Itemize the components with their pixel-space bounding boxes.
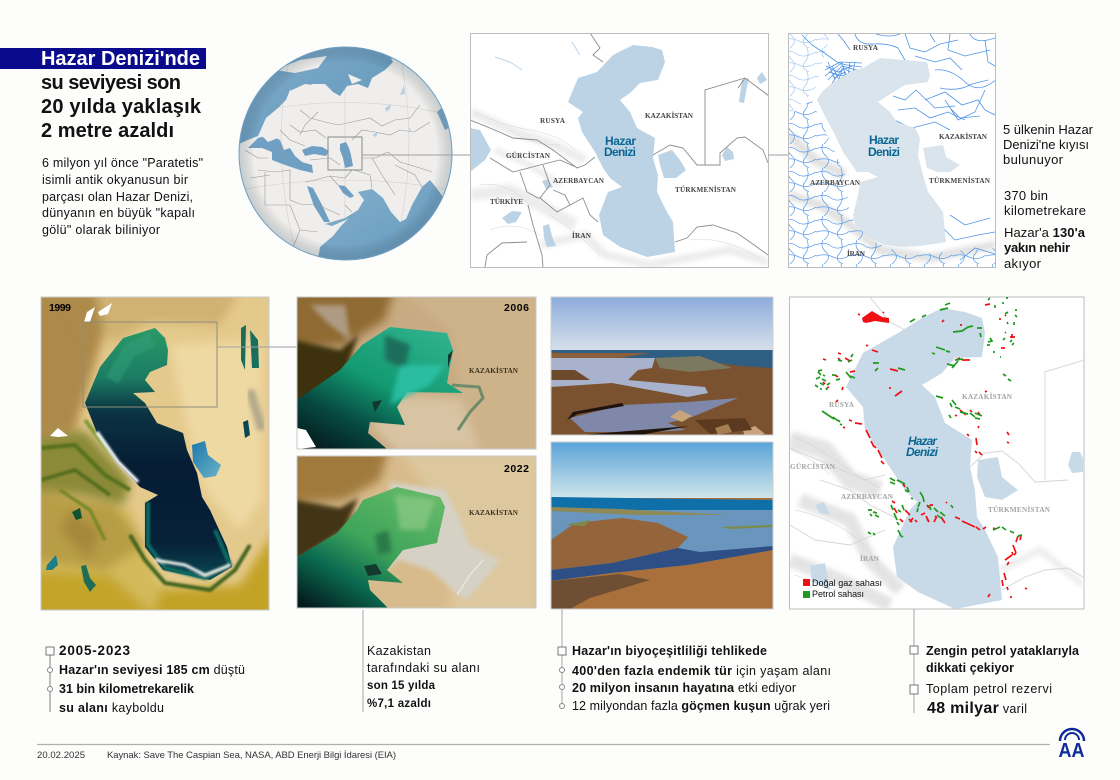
note: oil reserves: 48 milyar varil [927, 700, 1027, 717]
water: Black Sea [470, 128, 491, 172]
side facts text: bulunuyor [1003, 152, 1064, 167]
year label: 2006 [504, 302, 529, 314]
satellite image 2022 [296, 456, 536, 608]
note: Kazakhstan side: son 15 yılda [367, 680, 436, 692]
Garabogaz Bay [658, 150, 686, 178]
map labels [810, 44, 991, 258]
terrain shading [790, 440, 1083, 605]
intro text block: parçası olan Hazar Denizi, [42, 190, 193, 204]
borders [245, 105, 432, 255]
map labels: İRAN [847, 248, 866, 258]
note: level drop: Hazar'ın seviyesi 185 cm düştü [59, 663, 245, 677]
note: oil reserves [910, 609, 1080, 717]
map labels: AZERBAYCAN [841, 493, 894, 501]
dense river texture [789, 100, 995, 267]
side facts text: 5 ülkenin Hazar [1003, 122, 1094, 137]
map labels: Denizi [868, 145, 900, 159]
note: level drop: 2005-2023 [59, 643, 130, 658]
satellite image 1999 [40, 296, 270, 610]
note: biodiversity: 400'den fazla endemik tür için yaşam alanı [572, 664, 831, 678]
map labels: KAZAKİSTAN [939, 131, 988, 141]
connector line [362, 154, 471, 156]
country labels: GÜRCİSTAN [506, 150, 551, 160]
country labels: Denizi [604, 145, 636, 159]
year label: 2022 [504, 463, 529, 475]
country labels: RUSYA [540, 117, 566, 125]
lakes [372, 85, 411, 137]
Caspian Sea [846, 308, 1002, 609]
note: biodiversity: 12 milyondan fazla göçmen kuşun uğrak yeri [572, 699, 830, 713]
note: level drop: 31 bin kilometrekarelik [59, 682, 194, 696]
borders [470, 33, 769, 267]
terrain shading [471, 112, 768, 265]
legend [803, 578, 882, 599]
intro text block [42, 156, 203, 237]
note: oil reserves: Zengin petrol yataklarıyla [926, 644, 1080, 658]
map: Hazar Denizi countries [470, 33, 769, 268]
sea 2022 [297, 487, 445, 608]
note: Kazakhstan side: tarafındaki su alanı [367, 661, 480, 675]
connector line between maps [768, 154, 788, 156]
country labels [490, 110, 737, 240]
Garabogaz Bay [923, 145, 960, 172]
note: oil reserves: Toplam petrol rezervi [926, 682, 1052, 696]
note: Kazakhstan side [363, 610, 480, 712]
map labels: TÜRKMENİSTAN [988, 504, 1051, 514]
note: biodiversity: 20 milyon insanın hayatına etki ediyor [572, 681, 796, 695]
intro text block: 6 milyon yıl önce "Paratetis" [42, 156, 203, 170]
intro text block: dünyanın en büyük "kapalı [42, 206, 195, 220]
country labels: KAZAKİSTAN [645, 110, 694, 120]
rivers [802, 34, 1000, 260]
title [0, 48, 206, 142]
side facts text: kilometrekare [1004, 203, 1086, 218]
note: oil reserves: dikkati çekiyor [926, 661, 1014, 675]
icon: AA logo: AA [1058, 740, 1084, 762]
Caspian Sea [817, 58, 946, 247]
country label: KAZAKİSTAN [469, 507, 519, 517]
side facts text [1003, 122, 1094, 271]
map labels: RUSYA [829, 401, 855, 409]
title: 2 metre azaldı [41, 120, 174, 142]
year label: 1999 [49, 302, 71, 314]
map labels: AZERBAYCAN [810, 179, 861, 187]
title: su seviyesi son [41, 72, 181, 94]
Caspian Sea 1999 [85, 328, 232, 580]
map labels [790, 391, 1051, 563]
note: biodiversity: Hazar'ın biyoçeşitliliği tehlikede [572, 644, 767, 658]
note: Kazakhstan side: %7,1 azaldı [367, 698, 431, 710]
oil fields [815, 298, 1022, 537]
water: lakes and rivers [502, 72, 767, 247]
photo: lagoon and beach [551, 442, 773, 609]
country labels: İRAN [572, 230, 592, 240]
selection box [83, 322, 217, 407]
note: biodiversity [558, 609, 831, 713]
icon: AA logo [1058, 729, 1084, 762]
map labels: Hazar [869, 133, 899, 147]
map labels: Denizi [906, 445, 939, 459]
map labels: TÜRKMENİSTAN [929, 175, 991, 185]
lagoon [452, 385, 483, 430]
side facts text: yakın nehir [1004, 240, 1070, 255]
borders [790, 297, 1084, 590]
connector line [217, 346, 297, 348]
map: rivers [788, 34, 1000, 268]
terrain shading [789, 135, 995, 258]
Garabogaz Bay [977, 457, 1018, 500]
legend: Petrol sahası [812, 589, 864, 599]
country labels: TÜRKMENİSTAN [675, 184, 737, 194]
globe [238, 46, 470, 260]
satellite image 2006 [296, 296, 536, 450]
map labels: KAZAKİSTAN [962, 391, 1013, 401]
photo: dried shore [551, 297, 773, 436]
country labels: TÜRKİYE [490, 196, 523, 206]
sea 2006 [297, 327, 463, 449]
Caspian Sea [568, 45, 675, 257]
legend: Doğal gaz sahası [812, 578, 882, 588]
lakes and snow [192, 441, 221, 478]
map labels: İRAN [860, 553, 880, 563]
country labels: Hazar [605, 134, 636, 148]
oceans [240, 48, 393, 144]
country labels: AZERBAYCAN [553, 177, 605, 185]
map: oil and gas fields [790, 297, 1084, 609]
side facts text: Denizi'ne kıyısı [1003, 137, 1089, 152]
note: Kazakhstan side: Kazakistan [367, 644, 431, 658]
side facts text: 370 bin [1004, 188, 1048, 203]
side facts text: Hazar'a 130'a [1004, 225, 1086, 240]
footer rule [37, 744, 1050, 746]
map labels: Hazar [908, 434, 938, 448]
title: 20 yılda yaklaşık [41, 96, 202, 118]
title: Hazar Denizi'nde [41, 48, 200, 70]
locator box on globe [328, 137, 362, 170]
title highlight bar [0, 48, 206, 69]
country label: KAZAKİSTAN [469, 365, 519, 375]
footer date and source: 20.02.2025 [37, 750, 85, 761]
map labels: RUSYA [853, 44, 879, 52]
water bodies [810, 452, 1083, 590]
map labels: GÜRCİSTAN [790, 461, 836, 471]
land: Scandinavia and Arctic islands [286, 84, 312, 100]
side facts text: akıyor [1004, 256, 1042, 271]
note: level drop: su alanı kayboldu [59, 701, 164, 715]
intro text block: gölü" olarak biliniyor [42, 223, 160, 237]
footer date and source: Kaynak: Save The Caspian Sea, NASA, ABD Enerji Bilgi İdaresi (EIA) [107, 750, 396, 761]
gas fields [823, 304, 1027, 597]
note: level drop [46, 643, 245, 715]
intro text block: isimli antik okyanusun bir [42, 173, 188, 187]
